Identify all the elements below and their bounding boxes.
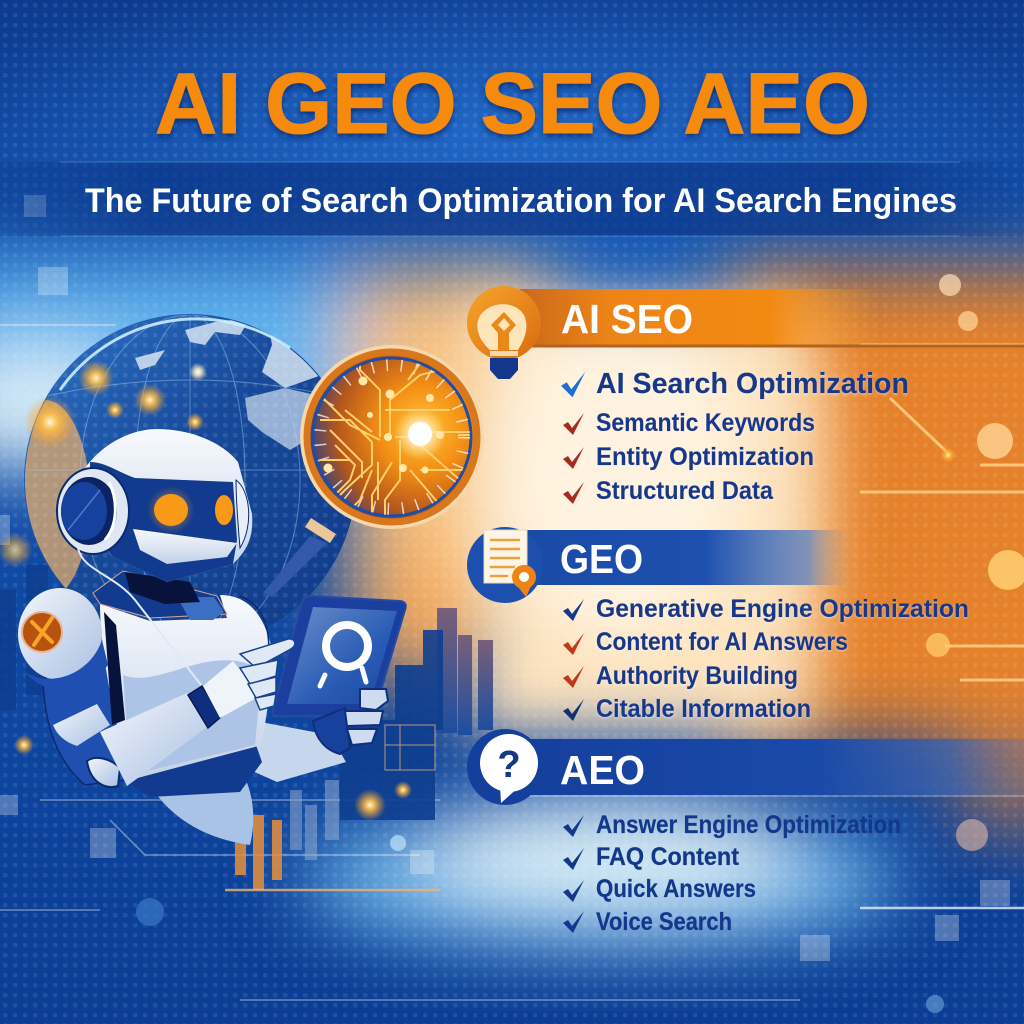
upper arm xyxy=(43,650,125,787)
list: AI SEO: Semantic Keywords xyxy=(596,409,815,437)
icon: question speech bubble: ? xyxy=(497,744,521,786)
city skyline left xyxy=(0,560,100,710)
list: AEO xyxy=(563,811,901,936)
list: GEO xyxy=(563,595,969,723)
magnifier handle xyxy=(263,518,336,597)
shoulder xyxy=(18,588,108,690)
tablet xyxy=(273,596,406,716)
icon: light bulb xyxy=(467,286,541,379)
section: AI SEO: AI SEO xyxy=(561,296,693,342)
subtitle band xyxy=(0,162,1024,236)
section: AEO xyxy=(467,729,1024,805)
list: AI SEO xyxy=(561,368,909,505)
robot xyxy=(18,429,406,845)
list: AI SEO: AI Search Optimization xyxy=(596,368,909,400)
magnifier lens xyxy=(302,347,482,527)
section: GEO xyxy=(467,527,860,603)
earphone cable xyxy=(78,548,205,690)
list: AEO: Answer Engine Optimization xyxy=(596,811,901,839)
subtitle band: The Future of Search Optimization for AI Search Engines xyxy=(85,182,957,220)
list: AEO: Quick Answers xyxy=(596,875,756,903)
right hand fingers xyxy=(313,689,388,754)
city skyline right xyxy=(0,532,493,890)
eyes xyxy=(147,486,233,534)
magnifying glass with circuit xyxy=(263,347,482,597)
list: AEO: FAQ Content xyxy=(596,843,740,871)
section: AEO: AEO xyxy=(560,747,645,793)
list: GEO: Citable Information xyxy=(596,695,811,723)
torso xyxy=(100,595,272,780)
section: GEO: GEO xyxy=(560,536,643,582)
headphone ear xyxy=(57,468,129,554)
lower body xyxy=(115,700,346,845)
left hand fingers xyxy=(240,639,295,710)
icon: question speech bubble xyxy=(467,729,543,805)
section: AI SEO xyxy=(467,286,1024,379)
list: GEO: Authority Building xyxy=(596,662,798,690)
title: AI GEO SEO AEO xyxy=(155,56,870,152)
band xyxy=(515,739,1024,795)
neck xyxy=(125,572,200,604)
band xyxy=(515,530,860,585)
band xyxy=(520,289,880,345)
collar and chest plate xyxy=(93,571,227,620)
head xyxy=(57,429,252,582)
list: GEO: Content for AI Answers xyxy=(596,628,848,656)
list: AI SEO: Structured Data xyxy=(596,477,774,505)
list: AEO: Voice Search xyxy=(596,908,732,936)
icon: document with badge xyxy=(467,527,543,603)
forearm xyxy=(100,661,260,786)
list: GEO: Generative Engine Optimization xyxy=(596,595,969,623)
globe xyxy=(24,314,352,628)
list: AI SEO: Entity Optimization xyxy=(596,443,814,471)
